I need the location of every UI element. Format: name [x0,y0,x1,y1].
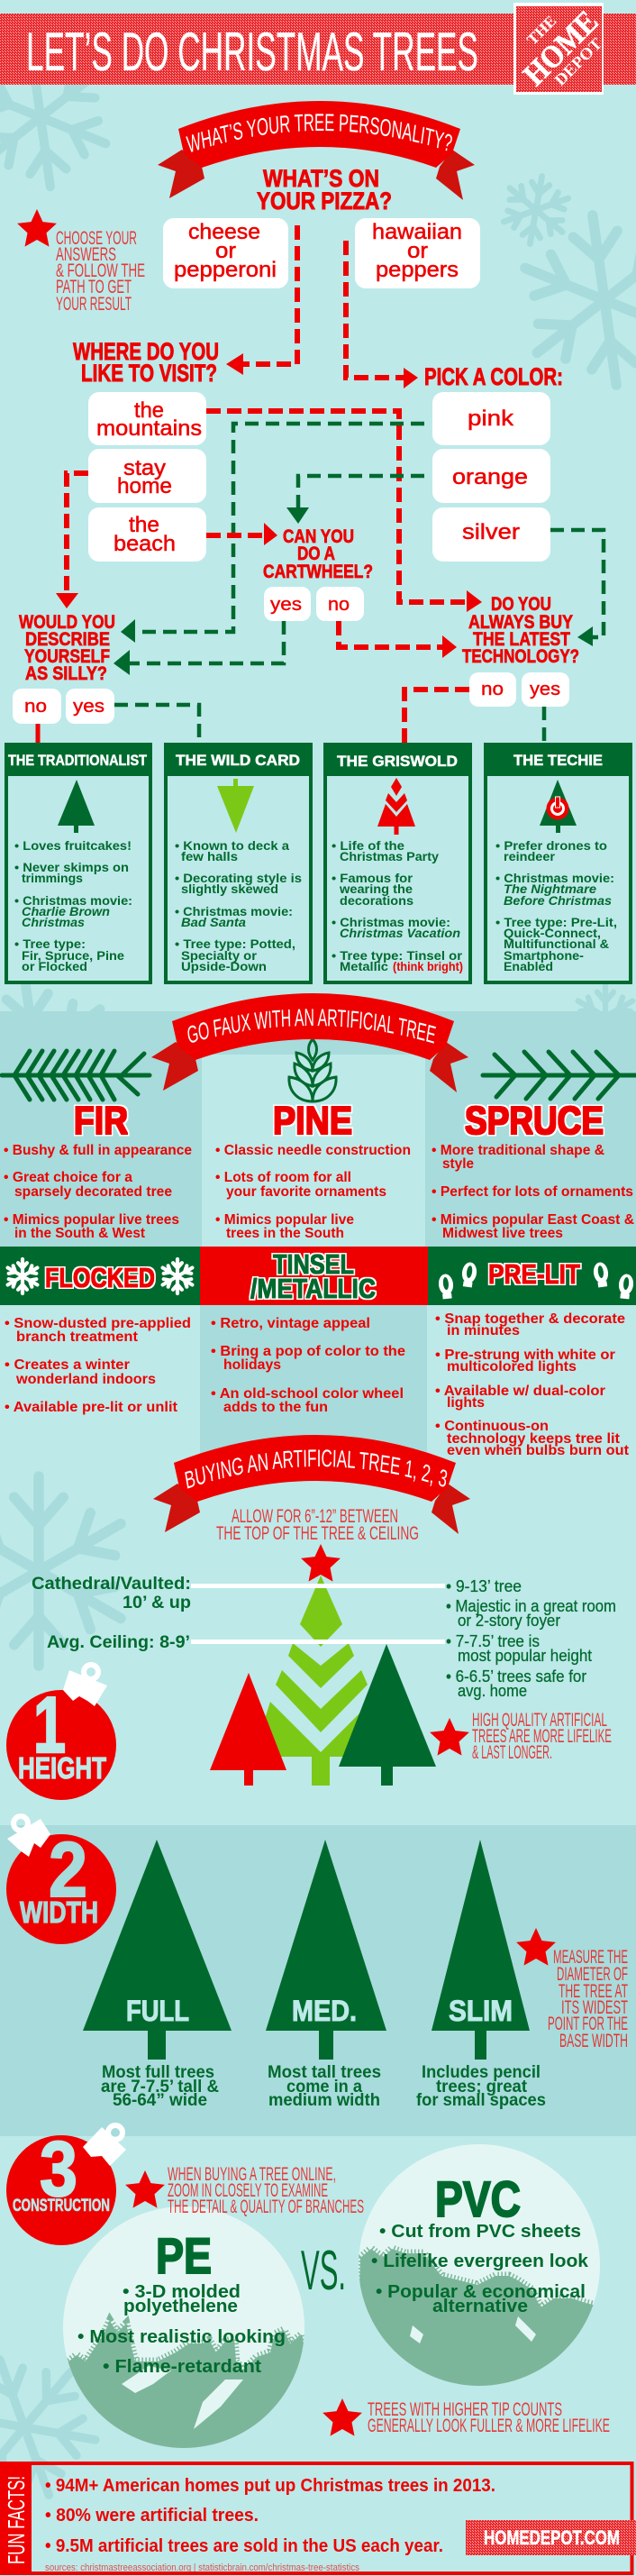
option: silly no [13,689,61,724]
list: pre-lit: • Snap together & decorate [435,1311,625,1327]
traditionalist details: Charlie Brown [22,905,110,918]
banner: buying an artificial tree 1 2 3 [153,1435,470,1534]
facts list: • 94M+ American homes put up Christmas trees in 2013. [45,2476,495,2496]
ornament 1: height: 1 [33,1680,66,1769]
griswold details: decorations [340,894,413,908]
snowflake behind cards right [574,985,636,1048]
ceiling line: cathedral [191,1584,445,1588]
circle: PE [63,2206,304,2448]
option: silver [432,507,550,562]
option: the beach: the [129,513,159,537]
ornament 3: construction [6,2125,126,2245]
header: tinsel metallic: TINSEL [273,1248,354,1280]
circle: PVC: • Popular & economical [376,2282,586,2302]
techie details: • Christmas movie: [495,872,614,885]
list: tree heights: • Majestic in a great room [446,1597,616,1615]
header: pre-lit [428,1247,636,1305]
column: pine: • Classic needle construction [215,1143,411,1158]
label: ceiling heights [32,1575,191,1652]
header: tinsel metallic: /METALLIC [250,1273,376,1304]
card: the traditionalist: THE TRADITIONALIST [8,752,148,769]
wild card details: • Decorating style is [175,872,302,885]
icon: red chevron tree [377,778,415,835]
connector: silly yes to wild card [114,705,199,739]
option: cheese or pepperoni [163,218,288,288]
star: tree topper [301,1544,341,1582]
snowflake mid left [0,1476,133,1666]
list: flocked: • Snow-dusted pre-applied [5,1316,191,1331]
griswold details: • Christmas movie: [332,916,450,929]
heading: do you always buy the latest technology: THE LATEST [473,629,570,650]
header: tinsel metallic [200,1247,428,1305]
ornament 1: height [6,1665,116,1800]
techie details: • Tree type: Pre-Lit, [495,916,617,929]
option: the mountains [88,392,206,445]
option: pink [432,392,550,445]
tip: choose your answers: & FOLLOW THE [56,260,145,281]
option: cartwheel yes [264,587,311,621]
option: hawaiian or peppers: hawaiian [372,220,462,244]
snowflake small right [496,170,576,250]
caption: slim [416,2063,546,2110]
column: fir: • Mimics popular live trees [4,1212,179,1228]
column: pine: • Mimics popular live [215,1212,354,1228]
option: orange: orange [452,465,528,489]
tree: medium: MED. [292,1995,357,2027]
circle: PE: • 3-D molded [123,2282,241,2302]
header: pre-lit: PRE-LIT [488,1258,580,1290]
ornament 2: width [6,1816,116,1944]
list: pre-lit: lights [447,1395,485,1411]
panel: width band [0,1825,636,2136]
list: tinsel metallic: adds to the fun [223,1400,328,1415]
tip: high quality artificial trees [472,1710,612,1763]
column: fir: in the South & West [14,1226,146,1241]
column: spruce: • More traditional shape & [432,1143,604,1158]
column: spruce: • Mimics popular East Coast & [432,1212,634,1228]
caption: slim: for small spaces [416,2091,546,2110]
wild card details: few halls [181,850,238,863]
techie details: • Prefer drones to [495,839,607,853]
icon: green tree [58,780,95,833]
heading: what's on your pizza: YOUR PIZZA? [257,187,392,215]
tree: full: FULL [126,1995,189,2027]
arrow: stay home path to silly question [56,473,88,608]
tree: medium [266,1840,386,2060]
circle: PE: • Most realistic looking [77,2327,286,2347]
techie details [495,839,617,973]
banner: go faux with an artificial tree [151,993,468,1092]
Home Depot logo: DEPOT [550,34,605,89]
red tree [210,1673,286,1786]
list: tinsel metallic: • Retro, vintage appeal [211,1316,370,1331]
list: tree heights: • 9-13’ tree [446,1577,522,1595]
caption: medium: Most tall trees [268,2063,381,2082]
traditionalist details: trimmings [22,872,83,885]
option: stay home: home [117,474,172,498]
list: flocked [5,1316,191,1415]
connector: technology yes to techie [542,707,546,743]
list: pre-lit: • Pre-strung with white or [435,1347,615,1363]
label: ceiling heights: Avg. Ceiling: 8-9’ [47,1633,190,1652]
list: pre-lit: • Continuous-on [435,1419,549,1434]
header: flocked: FLOCKED [45,1262,155,1293]
tip: measure the diameter [548,1947,628,2051]
arrow: orange path to cartwheel [286,476,424,524]
label: ceiling heights: Cathedral/Vaulted: [32,1575,191,1594]
heading: where do you like to visit: LIKE TO VISIT? [81,360,217,387]
option: hawaiian or peppers: or [407,239,428,263]
wild card details: slightly skewed [181,882,278,896]
tip: choose your answers: YOUR RESULT [56,294,132,315]
list: tinsel metallic [211,1316,405,1415]
ornament 3: construction: 3 [40,2126,77,2213]
arrow: silver path to latest technology [550,530,604,646]
ornament 1: height: HEIGHT [18,1751,106,1785]
option: technology no [469,672,516,707]
caption: medium: come in a [286,2078,362,2096]
heading: do you always buy the latest technology: ALWAYS BUY [468,612,573,633]
circle: PVC: • Cut from PVC sheets [379,2222,581,2242]
griswold details: Christmas Vacation [340,927,460,940]
list: tree heights: avg. home [458,1682,527,1700]
caption: medium [268,2063,381,2110]
option: technology yes: yes [530,680,560,699]
list: flocked: • Creates a winter [5,1357,130,1373]
option: technology yes [522,672,569,707]
griswold details: wearing the [339,882,413,896]
techie details: reindeer [504,850,556,863]
option: stay home: stay [123,456,166,480]
caption: slim: trees; great [436,2078,528,2096]
heading: do you always buy the latest technology [462,594,579,667]
column: spruce: • Perfect for lots of ornaments [432,1184,633,1200]
circle: PVC: • Lifelike evergreen look [371,2252,589,2271]
list: tinsel metallic: • An old-school color wheel [211,1386,404,1402]
caption: full: 56-64” wide [113,2091,207,2110]
circle: PVC: alternative [432,2297,528,2316]
star: measure [516,1928,556,1966]
tip: allow between tree and ceiling: THE TOP OF THE TREE & CEILING [216,1523,419,1544]
icon: light bulbs [438,1261,634,1300]
option: stay home [88,449,206,503]
list: pre-lit: multicolored lights [447,1359,577,1375]
connector: technology no to griswold [404,690,469,744]
card: the traditionalist [5,743,152,984]
header band [0,14,636,85]
tip: choose your answers: CHOOSE YOUR [56,228,137,249]
snowflake lower left [0,2335,116,2519]
option: silver: silver [462,520,520,544]
caption: medium: medium width [268,2091,380,2110]
griswold details: Metallic [340,960,389,973]
column: spruce: style [442,1156,474,1172]
list: pre-lit: even when bulbs burn out [447,1443,630,1458]
list: pre-lit [435,1311,630,1458]
column: pine: your favorite ornaments [226,1184,386,1200]
traditionalist details: • Tree type: [14,937,86,951]
wild card details: Bad Santa [181,916,247,929]
heading: would you describe yourself as silly: AS SILLY? [25,663,107,684]
option: technology no: no [481,680,504,699]
griswold details: (think bright) [393,960,463,973]
ceiling line: average [191,1640,445,1644]
option: pink: pink [468,406,514,431]
snowflake large right [508,204,636,397]
tip: choose your answers: PATH TO GET [56,277,132,297]
star: high quality [430,1718,469,1756]
griswold details [332,839,463,973]
card: the griswold [323,743,472,984]
traditionalist details: Fir, Spruce, Pine [22,949,125,963]
card: the griswold: THE GRISWOLD [337,753,458,770]
list: tree heights: most popular height [458,1647,592,1665]
sources: sources: christmastreeassociation.org | statisticbrain.com/christmas-tree-statistics [45,2562,359,2573]
list: pre-lit: • Available w/ dual-color [435,1384,605,1399]
list: pre-lit: in minutes [447,1323,520,1338]
icon: pine sprig [289,1039,336,1101]
column: spruce: SPRUCE [465,1099,604,1143]
arrow: cartwheel yes [114,621,284,675]
column: pine: PINE [273,1099,352,1143]
tip: when buying online: ZOOM IN CLOSELY TO EXAMINE [168,2180,328,2201]
list: tinsel metallic: holidays [223,1357,281,1373]
column: spruce: Midwest live trees [442,1226,563,1241]
caption: full [101,2063,219,2110]
list: tree heights: • 6-6.5’ trees safe for [446,1667,586,1685]
tree: slim: SLIM [449,1995,513,2027]
wild card details: • Christmas movie: [175,905,293,918]
card: the wild card [164,743,313,984]
circle: PE: • Flame-retardant [103,2357,261,2377]
option: orange [432,449,550,503]
techie details: Multifunctional & [504,937,609,951]
icon: tree with power button [540,780,577,833]
circle: PVC: PVC [435,2170,521,2227]
label: ceiling heights: 10’ & up [123,1594,191,1612]
snowflake behind cards left [0,967,127,1151]
heading: do you always buy the latest technology: DO YOU [491,594,551,615]
heading: would you describe yourself as silly: DESCRIBE [25,629,110,650]
icon: upside-down lime tree [217,779,254,833]
techie details: The Nightmare [504,882,597,896]
list: flocked: • Available pre-lit or unlit [5,1400,178,1415]
caption: full: Most full trees [102,2063,214,2082]
list: tree heights [446,1577,616,1700]
arrow: beach path to cartwheel [206,523,277,545]
tip: choose your answers [56,228,145,315]
card: the wild card: THE WILD CARD [176,752,300,769]
tip: high quality artificial trees: & LAST LONGER. [472,1742,552,1763]
list: tree heights: • 7-7.5’ tree is [446,1632,540,1650]
option: the mountains: the [134,398,164,423]
traditionalist details: • Loves fruitcakes! [14,839,132,853]
tree: slim [432,1840,530,2060]
option: cheese or pepperoni: cheese [188,220,260,244]
techie details: Before Christmas [504,894,613,908]
versus label: VS. [301,2240,346,2302]
tip: choose your answers: ANSWERS [56,244,116,265]
tree: full [83,1840,232,2060]
ornament 3: construction: CONSTRUCTION [13,2197,110,2215]
tip: when buying online: THE DETAIL & QUALITY OF BRANCHES [168,2197,364,2217]
arrow: pink path to silly question [121,424,424,643]
heading: would you describe yourself as silly: WOULD YOU [19,612,115,633]
dark green tree [339,1644,436,1786]
traditionalist details: • Never skimps on [14,861,129,874]
lime chevron tree [264,1576,368,1786]
option: the beach: beach [114,532,176,556]
wild card details [175,839,302,973]
heading: where do you like to visit: WHERE DO YOU [73,338,219,365]
column: fir: • Bushy & full in appearance [4,1143,192,1158]
heading: what's on your pizza: WHAT’S ON [263,165,379,192]
card: the techie: THE TECHIE [513,752,603,769]
heading: would you describe yourself as silly: YOURSELF [24,646,110,667]
option: cartwheel yes: yes [270,595,302,615]
arrow: hawaiian path to pick a color [346,241,418,388]
column: pine [215,1099,411,1241]
column: fir: sparsely decorated tree [14,1184,172,1200]
caption: full: are 7-7.5’ tall & [101,2078,219,2096]
option: hawaiian or peppers [355,218,480,288]
heading: can you do a cartwheel: CAN YOU [283,526,354,547]
caption: slim: Includes pencil [422,2063,541,2082]
panel: artificial tree types background [0,1011,636,1458]
circle: PVC [356,2144,604,2398]
ornament 2: width: WIDTH [20,1895,98,1929]
column: pine: trees in the South [226,1226,344,1241]
option: silly yes [66,689,114,724]
card: the techie [484,743,632,984]
column: fir [4,1099,192,1241]
banner: go faux with an artificial tree: GO FAUX WITH AN ARTIFICIAL TREE [187,1009,436,1044]
star: choose answers [17,209,57,247]
panel: fun facts [0,2462,636,2574]
heading: what's on your pizza [257,165,392,215]
circle: PE: polyethelene [123,2297,238,2316]
banner: what's your tree personality: WHAT’S YOUR TREE PERSONALITY? [186,114,452,152]
heading: can you do a cartwheel: DO A [297,544,335,564]
list: pre-lit: technology keeps tree lit [447,1431,621,1447]
column: pine: • Lots of room for all [215,1170,351,1185]
option: cartwheel no [316,587,364,621]
heading: can you do a cartwheel [263,526,373,582]
option: silly yes: yes [73,697,104,717]
facts list: • 80% were artificial trees. [45,2506,259,2526]
heading: would you describe yourself as silly [19,612,115,684]
tip: higher tip counts [368,2399,610,2436]
tip: allow between tree and ceiling [216,1506,419,1544]
star: tip counts [323,2398,362,2436]
ornament 2: width: 2 [49,1827,87,1914]
tip: when buying online: WHEN BUYING A TREE ONLINE, [168,2164,336,2185]
traditionalist details [14,839,132,973]
traditionalist details: • Christmas movie: [14,894,132,908]
heading: pick a color: PICK A COLOR: [424,363,563,390]
techie details: Enabled [504,960,553,973]
techie details: Smartphone- [504,949,584,963]
list: flocked: branch treatment [16,1329,139,1345]
griswold details: • Life of the [332,839,405,853]
banner: buying an artificial tree 1 2 3: BUYING AN ARTIFICIAL TREE 1, 2, 3 [185,1449,447,1489]
column: spruce [432,1099,634,1241]
star: zoom in [125,2170,165,2208]
facts list: • 9.5M artificial trees are sold in the US each year. [45,2536,443,2556]
traditionalist details: Christmas [22,916,86,929]
tip: when buying online [168,2164,364,2217]
circle: PE: PE [156,2227,212,2284]
facts list [45,2476,495,2556]
banner: what's your tree personality [158,101,475,200]
column: fir: FIR [74,1099,128,1143]
option: the beach [88,507,206,562]
list: flocked: wonderland indoors [15,1372,156,1387]
wild card details: Specialty or [181,949,258,963]
griswold details: • Tree type: Tinsel or [332,949,463,963]
list: tinsel metallic: • Bring a pop of color to the [211,1344,405,1359]
Home Depot logo: THE [523,12,559,49]
arrow: cartwheel no [339,621,457,658]
techie details: Quick-Connect, [504,927,601,940]
tip: allow between tree and ceiling: ALLOW FOR 6”-12” BETWEEN [232,1506,398,1527]
arrow: mountains path to latest technology [206,411,482,612]
option: cheese or pepperoni: pepperoni [174,258,277,282]
wild card details: • Tree type: Potted, [175,937,295,951]
column: fir: • Great choice for a [4,1170,132,1185]
wild card details: • Known to deck a [175,839,290,853]
option: the mountains: mountains [96,416,202,441]
snowflake top left [0,38,120,196]
icon: spruce branch [483,1052,636,1099]
list: tree heights: or 2-story foyer [458,1612,560,1630]
heading: where do you like to visit [73,338,219,387]
icon: fir branch [2,1051,150,1100]
heading: can you do a cartwheel: CARTWHEEL? [263,562,373,582]
heading: do you always buy the latest technology: TECHNOLOGY? [462,646,579,667]
website badge [466,2520,636,2555]
wild card details: Upside-Down [181,960,267,973]
griswold details: Christmas Party [340,850,440,863]
option: cheese or pepperoni: or [215,239,236,263]
header: flocked [0,1247,200,1305]
connector: silly no to traditionalist [36,724,40,743]
option: hawaiian or peppers: peppers [376,258,459,282]
option: silly no: no [24,697,47,717]
option: cartwheel no: no [328,595,350,615]
traditionalist details: or Flocked [22,960,87,973]
griswold details: • Famous for [332,872,413,885]
fun facts label: FUN FACTS! [3,2476,30,2564]
arrow: cheese path to where do you like to visit [226,225,297,375]
